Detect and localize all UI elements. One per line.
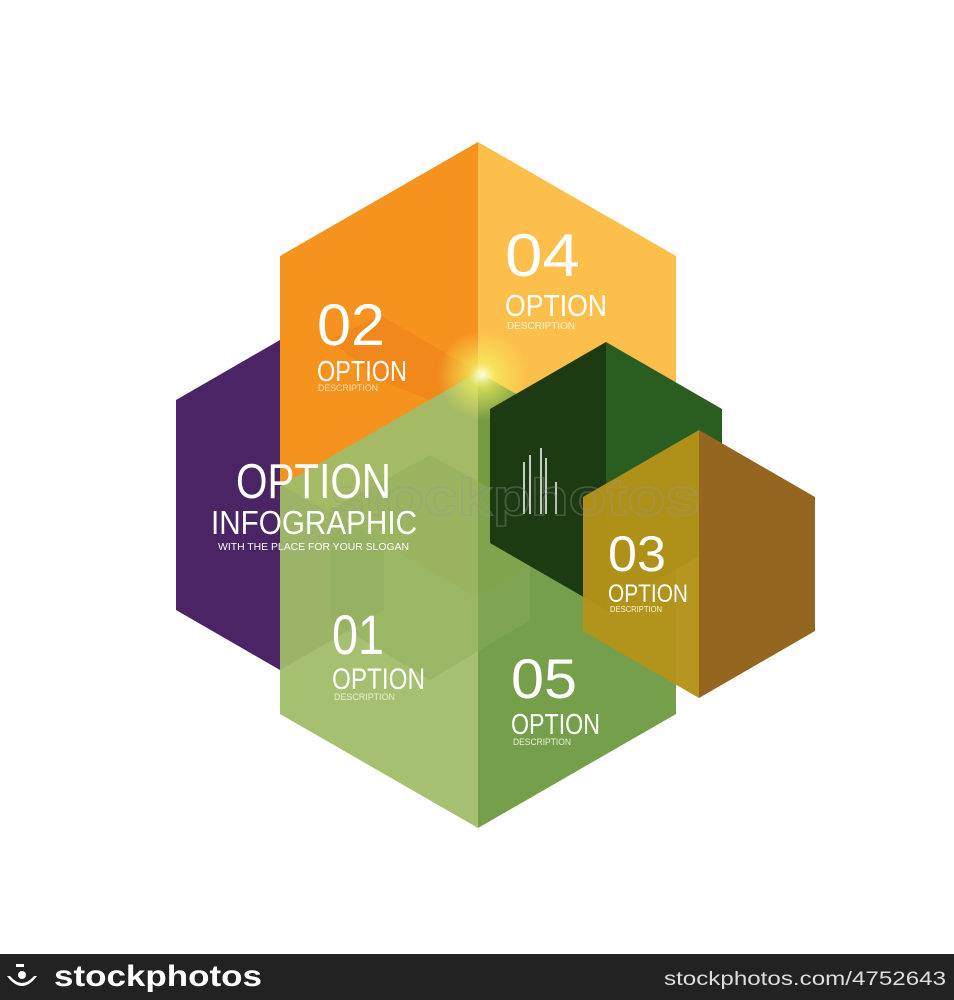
- text: option 02: OPTION: [317, 356, 407, 388]
- text: option 03: OPTION: [608, 580, 688, 608]
- text: option 05: DESCRIPTION: [513, 737, 571, 747]
- icon: bar lines: [524, 448, 556, 514]
- title: option infographic: [211, 455, 417, 553]
- text: option 02: 02: [317, 293, 385, 358]
- text: option 04: DESCRIPTION: [507, 321, 575, 332]
- text: option 01: DESCRIPTION: [334, 692, 395, 702]
- title: option infographic: INFOGRAPHIC: [211, 504, 417, 541]
- text: option 05: [511, 647, 600, 747]
- glow at center: [437, 330, 527, 420]
- hexagon: dark green (chart icon): [490, 342, 722, 610]
- text: option 03: DESCRIPTION: [610, 605, 662, 614]
- footer bar: stockphotos: [54, 960, 262, 993]
- footer bar: [0, 954, 954, 1000]
- title: option infographic: WITH THE PLACE FOR YOUR SLOGAN: [218, 542, 409, 553]
- text: option 04: OPTION: [505, 288, 607, 323]
- text: option 03: [608, 526, 688, 614]
- text: option 01: OPTION: [332, 663, 425, 696]
- text: option 03: 03: [608, 526, 666, 582]
- hexagon: green (01 / 05): [280, 372, 676, 828]
- hexagon: purple: [176, 340, 384, 670]
- text: option 05: OPTION: [511, 709, 600, 741]
- footer bar: stockphotos.com/4752643: [664, 969, 946, 990]
- watermark: stockphotos: [330, 469, 700, 527]
- hexagon: orange (02 / 04): [280, 142, 676, 598]
- text: option 02: DESCRIPTION: [318, 383, 378, 393]
- text: option 04: 04: [505, 222, 580, 289]
- title: option infographic: OPTION: [236, 455, 391, 509]
- text: option 01: [332, 603, 425, 702]
- text: option 04: [505, 222, 607, 332]
- text: option 01: 01: [332, 603, 384, 666]
- icon: logo: [7, 964, 37, 986]
- text: option 02: [317, 293, 407, 393]
- text: option 05: 05: [511, 647, 577, 710]
- hexagon: brown (03): [583, 430, 815, 698]
